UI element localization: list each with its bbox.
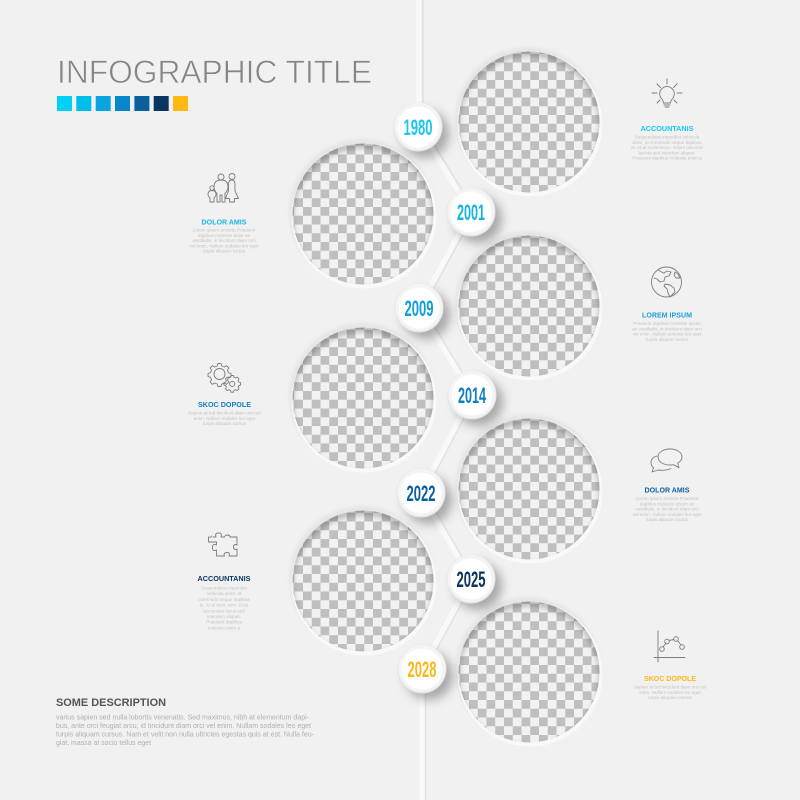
text block: dolor amis right: DOLOR AMIS — [644, 486, 690, 494]
year badge 2009: 2009 — [404, 296, 434, 321]
icon: gears — [208, 364, 241, 392]
text block: accountanis left: ACCOUNTANIS — [198, 574, 251, 583]
text block: accountanis right: dolor, at commodo neque dapibus — [632, 140, 702, 145]
colour swatches — [57, 96, 188, 111]
text block: dolor amis right — [633, 486, 702, 522]
text block: skoc dopole right: Sapien at tod tincidunt diam orci vel — [634, 684, 706, 690]
text block: lorem ipsum: vel enim. Nullam sodales leo eget — [633, 332, 702, 337]
text block: accountanis left: commodo neque dapibus — [198, 597, 250, 602]
icon: line chart — [654, 631, 685, 662]
text block: accountanis left: Praesent dapibus — [206, 620, 243, 625]
text block: skoc dopole right: turpis aliquam cursus — [648, 695, 692, 700]
photo placeholder left 1 — [289, 139, 436, 291]
description block: turpis aliquam cursus. Nam et velit non nulla ultricies egestas quis at est. Nulla feu- — [56, 730, 315, 738]
photo placeholder left 3 — [289, 506, 436, 658]
text block: dolor amis right: vestibulis, in tincidunt diam orci — [635, 507, 699, 512]
text block: accountanis left: is. At at nunc sem. Duis — [200, 603, 249, 608]
text block: dolor amis right: turpis aliquam luctus — [646, 517, 689, 522]
text block: skoc dopole right: SKOC DOPOLE — [644, 674, 696, 683]
text block: lorem ipsum: Praesent dapibus molestie ipsum — [633, 321, 701, 326]
description block: bus, ante orci feugiat arcu, id tincidunt diam orci vel enim. Nullam sodales leo eget — [56, 721, 311, 730]
text block: dolor amis left: Lorem ipsum amlorte Praesent — [193, 228, 256, 232]
year badge 2025 — [446, 554, 502, 610]
text block: skoc dopole right — [634, 674, 706, 700]
text block: accountanis left: accumsan lacus sed — [203, 608, 245, 613]
text block: lorem ipsum — [632, 310, 702, 342]
text block: lorem ipsum: an vestibulis, in tincidunt diam orci — [632, 326, 702, 331]
text block: dolor amis left: DOLOR AMIS — [202, 218, 247, 226]
year badge 2022 — [396, 468, 452, 524]
description block: varius sapien sed nulla lobortis venenatis. Sed maximus, nibh at elementum dapi- — [56, 712, 310, 722]
text block: accountanis left: interdum aliquet. — [207, 614, 241, 619]
text block: skoc dopole left — [188, 400, 261, 426]
text block: accountanis right: Praesent dapibus molestie enim a — [632, 156, 702, 161]
icon: light bulb — [652, 79, 682, 107]
text block: accountanis right: Suspendisse imperdiet vehicula — [635, 134, 700, 140]
timeline connector line — [419, 0, 473, 800]
title: INFOGRAPHIC TITLE — [57, 54, 372, 90]
icon: globe — [652, 267, 682, 297]
text block: accountanis right: lacinia sed interdum aliquet. — [639, 150, 695, 155]
year badge 2028: 2028 — [408, 657, 436, 682]
photo placeholder left 2 — [289, 323, 436, 475]
year badge 1980 — [394, 102, 449, 158]
text block: dolor amis left — [190, 218, 259, 254]
description block: giat, massa at socio tellus eget — [56, 738, 151, 747]
year badge 2014 — [448, 370, 503, 426]
icon: puzzle piece — [208, 533, 237, 556]
icon: speech bubbles — [651, 449, 682, 472]
photo placeholder right 1 — [455, 47, 602, 199]
text block: skoc dopole left: Sapien at tod tincidunt diam orci vel — [188, 410, 261, 416]
year badge 2014: 2014 — [458, 383, 486, 408]
text block: dolor amis left: vestibulis, in tincidunt diam orci — [192, 238, 256, 243]
text block: skoc dopole left: turpis aliquam cursus — [203, 421, 247, 426]
text block: skoc dopole left: SKOC DOPOLE — [198, 400, 251, 409]
text block: skoc dopole left: enim. Nullam sodales leo eget — [194, 416, 256, 421]
description block: SOME DESCRIPTION — [56, 697, 166, 709]
text block: dolor amis right: Lorem ipsum amlorte Praesent — [636, 496, 699, 501]
text block: dolor amis right: dapibus molestie ipsum an — [640, 501, 695, 506]
description block — [56, 697, 315, 747]
year badge 2009 — [394, 284, 450, 339]
text block: skoc dopole right: enim. Nullam sodales leo eget — [639, 690, 701, 695]
year badge 1980: 1980 — [404, 115, 432, 140]
text block: accountanis left: molestie enim a — [208, 625, 241, 630]
icon: family — [208, 174, 238, 202]
year badge 2025: 2025 — [456, 567, 486, 592]
text block: accountanis right: ACCOUNTANIS — [640, 124, 694, 133]
text block: dolor amis left: turpis aliquam luctus — [203, 249, 246, 254]
text block: accountanis left — [198, 574, 251, 630]
photo placeholder right 4 — [455, 597, 602, 749]
text block: lorem ipsum: LOREM IPSUM — [642, 310, 692, 320]
text block: lorem ipsum: turpis aliquam luctus — [646, 337, 689, 342]
year badge 2001: 2001 — [457, 200, 485, 225]
text block: accountanis right: is. At at scelerisque. Etiam placerat — [631, 145, 703, 150]
year badge 2028 — [398, 644, 453, 700]
year badge 2001 — [446, 188, 502, 243]
photo placeholder right 2 — [455, 231, 602, 383]
text block: dolor amis left: dapibus molestie dolor an — [198, 233, 251, 238]
photo placeholder right 3 — [455, 414, 602, 566]
text block: accountanis right — [631, 124, 703, 161]
text block: dolor amis left: vel enim. Nullam sodales leo eget — [190, 243, 259, 248]
text block: dolor amis right: vel enim. Nullam sodales leo eget — [633, 512, 702, 517]
text block: accountanis left: Suspendisse imperdiet — [201, 586, 248, 590]
year badge 2022: 2022 — [406, 481, 436, 506]
text block: accountanis left: vehicula dolor, at — [207, 591, 242, 596]
